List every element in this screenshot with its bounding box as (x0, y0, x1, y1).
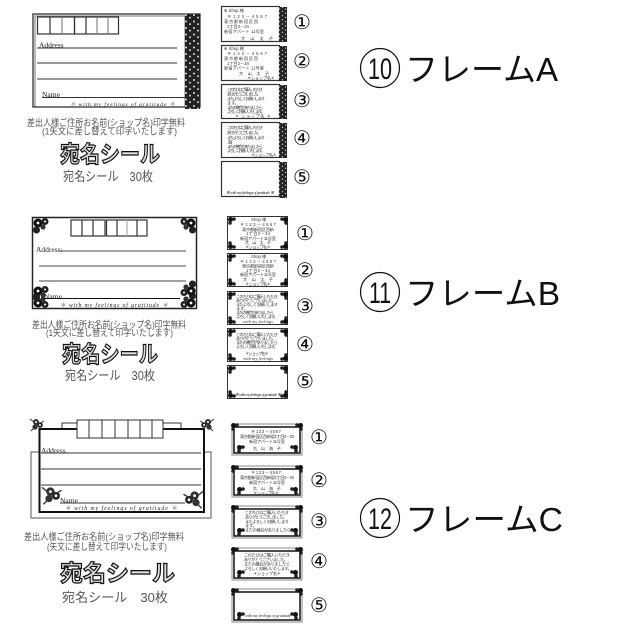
sample B3: よろしくお願いいたします。 (236, 313, 278, 320)
sample C1: 〒123－4567 (251, 429, 282, 434)
frame B sample numbers: ③ (296, 296, 314, 318)
frame A name label: Name (42, 90, 61, 99)
sample C4: よろしくお願いいたします。 (244, 565, 292, 572)
sample C2: 新宿アパート11号室 (249, 479, 285, 486)
sample B2: 新宿アパート11号室 (240, 271, 276, 278)
frame C sample numbers: ① (310, 427, 328, 449)
sample B4: ＊ショップ名＊ (245, 350, 269, 357)
sample B5 (228, 366, 288, 398)
frame A sample numbers (293, 12, 311, 189)
panel: frame B main label (32, 218, 196, 309)
sample C3 (231, 505, 303, 538)
sample B3 (228, 292, 288, 324)
frame C sample numbers: ③ (310, 511, 328, 533)
sample C3: このたびはご購入いただき (245, 509, 289, 516)
sample B2 (228, 253, 288, 288)
frame A sample numbers: ① (293, 12, 311, 34)
sample B3: またよろしくお願いします (236, 301, 278, 308)
frame B caption: 差出人様ご住所お名前(ショップ名)印字無料 (32, 319, 186, 331)
frame C samples (231, 423, 303, 622)
sample A3: またの機会がありましたら (227, 104, 263, 111)
sample B4: ありがとうございました。 (236, 335, 276, 342)
sample A3: ありがとうございました。 (227, 90, 261, 98)
sample C2: 丸 山 海 子 (253, 485, 281, 492)
sample A4: よろしくお願いいたします。 (227, 147, 265, 154)
sample A1: 1丁目2－34 (227, 24, 250, 30)
title: frame A: 10 (368, 53, 392, 86)
sample C1: 新宿アパート11号室 (249, 438, 285, 445)
frame B address label: Address: (36, 245, 63, 254)
frame A sample numbers: ④ (293, 128, 311, 150)
frame B postal code boxes (71, 220, 147, 236)
frame C sample numbers: ⑤ (310, 595, 328, 617)
sample A2: 新宿アパート 11号室 (224, 64, 264, 72)
sample C1: 丸 山 海 子 (253, 445, 281, 452)
sample C2: 東京都新宿区西新宿1丁目2－34 (240, 474, 295, 481)
sample B2: 大 山 太 子 (243, 276, 273, 283)
sample B1: ＊ショップ名＊ (245, 244, 271, 250)
title: frame A: フレームA (405, 51, 558, 88)
frame B sample numbers: ④ (296, 334, 314, 356)
sample B1: 〒123－4567 (240, 222, 277, 227)
frame A product name: 宛名シール (60, 141, 160, 167)
sample A2: 〒123－4567 (227, 51, 268, 56)
frame B caption line 2: (1矢文に差し替えて印字いたします) (46, 327, 173, 339)
frame A sample numbers: ② (293, 51, 311, 73)
sample A2: 東京都新宿区西 (224, 55, 258, 62)
frame A samples (222, 6, 287, 198)
sample B3: このたびはご購入いただき (236, 293, 278, 300)
sample A2 (222, 45, 287, 82)
frame A caption line 2: (1矢文に差し替えて印字いたします) (42, 126, 177, 138)
sample C3: またよろしくお願いします (245, 518, 289, 525)
frame C address label: Address (41, 446, 66, 455)
frame B sample numbers: ⑤ (296, 371, 314, 393)
frame A postal code boxes (38, 17, 118, 34)
frame A sample numbers: ③ (293, 90, 311, 112)
sample B4: with my feelings (243, 356, 273, 361)
sample B4 (228, 328, 288, 362)
sample A1 (222, 6, 287, 42)
sample A1: 〒123－4567 (227, 14, 268, 19)
sample B3: またの機会がありましたら (236, 309, 274, 316)
sample A3 (222, 84, 287, 120)
title: frame B: フレームB (405, 275, 560, 312)
frame C product name: 宛名シール (60, 560, 175, 586)
sample A2: 1丁目2－34 (227, 61, 250, 67)
sample C3: またの機会がありましたら (245, 526, 291, 534)
frame B sample numbers: ② (296, 260, 314, 282)
frame C postal code boxes (77, 420, 163, 438)
sample A1: 新宿アパート 11号室 (224, 28, 264, 35)
sample C2: ＊ショップ名＊ (253, 490, 279, 496)
title: frame C: フレームC (405, 501, 563, 538)
frame C caption: 差出人様ご住所お名前(ショップ名)印字無料 (24, 531, 184, 543)
sample C5 (231, 588, 303, 622)
sample B2: 1丁目2－34 (246, 268, 271, 274)
sample B3: with my feelings (243, 319, 273, 324)
frame C floral ornaments (30, 419, 214, 508)
frame B gratitude line: ＊ with my feelings of gratitude ＊ (60, 302, 168, 309)
frame B sample numbers: ① (296, 223, 314, 245)
sample A3: このたびはご購入いただき (227, 86, 263, 93)
sample C3: ます。 (245, 523, 257, 529)
sample A5: ✻ with my feelings of gratitude ✻ (226, 190, 274, 195)
sample A2: 大 山 太 子 (239, 70, 269, 77)
sample B1: Shop 様 (251, 216, 267, 222)
frame C gratitude line: ＊ with my feelings of gratitude ＊ (65, 505, 177, 512)
frame B address lines (39, 251, 186, 298)
frame A caption: 差出人様ご住所お名前(ショップ名)印字無料 (27, 117, 185, 129)
sample C4: またの機会がありましたら (244, 560, 290, 568)
frame B floral corners (33, 218, 196, 308)
sample C2: 〒123－4567 (251, 470, 282, 475)
sample A4: ありがとうございました。 (227, 129, 261, 136)
frame B name label: Name (44, 292, 63, 301)
sample A3: またよろしくお願いします (227, 95, 265, 102)
frame C address lines (41, 453, 201, 503)
sample A4: このたびはご購入いただき (227, 124, 263, 131)
sample B2: Shop 様 (251, 253, 267, 259)
frame B product name: 宛名シール (62, 341, 158, 367)
sample C5: with my feelings of gratitude (245, 613, 291, 618)
frame A address label: Address (39, 40, 64, 50)
sample A1: ✻ Shop 様 (224, 7, 245, 13)
sample A1: 大 山 太 子 (241, 35, 273, 42)
panel: frame C main label (30, 419, 214, 518)
frame A quantity: 宛名シール 30枚 (63, 169, 153, 184)
sample B5: ✻ with my feelings of gratitude ✻ (235, 392, 281, 397)
sample B1: 東京都新宿区西新 (242, 226, 274, 233)
frame C sample numbers: ② (310, 470, 328, 492)
frame C side tabs (62, 423, 181, 429)
frame B samples (228, 216, 288, 398)
sample B3: ます。 (236, 306, 248, 312)
sample A2: ＊ショップ名＊ (247, 74, 275, 82)
sample B1: 大 山 太 子 (245, 239, 271, 246)
sample C4: ＊ショップ名＊ (253, 570, 281, 577)
frame C sample numbers: ④ (310, 551, 328, 573)
sample B1 (228, 216, 288, 250)
frame A gratitude line: ＊ with my feelings of gratitude ＊ (70, 101, 175, 108)
sample A3: ます。 (227, 100, 239, 106)
sample A4 (222, 122, 287, 158)
sample B4: よろしくお願いいたします。 (236, 343, 278, 350)
sample A4: またよろしくお願いします (227, 134, 265, 141)
sample A4: ます。 (227, 140, 235, 146)
sample C4: ありがとうございました。 (244, 556, 288, 563)
sample A4: ＊ショップ名＊ (251, 152, 277, 158)
sample A1: 東京都新宿区西 (224, 18, 258, 25)
panel: frame A main label (33, 14, 200, 109)
frame B sample numbers (296, 223, 314, 393)
frame A address lines (37, 48, 185, 98)
sample B4: またの機会がありましたら (236, 339, 278, 346)
sample B1: 1丁目2－34 (246, 231, 271, 237)
title: frame C: 12 (368, 503, 392, 536)
sample A4: またの機会がありましたら (227, 143, 263, 150)
sample A3: よろしくお願いいたします。 (227, 108, 265, 115)
sample C4: このたびはご購入いただき (244, 552, 290, 558)
sample C1 (231, 423, 303, 455)
sample B4: このたびはご購入いただき (236, 331, 278, 338)
frame B quantity: 宛名シール 30枚 (65, 368, 155, 383)
frame C sample numbers (310, 427, 328, 617)
sample B3: ありがとうございました。 (236, 297, 276, 304)
sample B2: ＊ショップ名＊ (245, 280, 271, 288)
sample A3: ＊ ショップ名 ＊ (235, 112, 271, 120)
frame C quantity: 宛名シール 30枚 (62, 590, 168, 605)
title: frame B: 11 (369, 277, 391, 310)
sample C4 (231, 547, 303, 580)
frame A floral column (185, 14, 200, 109)
frame C caption line 2: (矢文に差し替えて印字いたします) (47, 541, 167, 553)
sample C2 (231, 465, 303, 497)
sample C1: 東京都新宿区西新宿1丁目2－34 (240, 433, 295, 440)
frame A sample numbers: ⑤ (293, 167, 311, 189)
sample C3: ありがとうございました。 (245, 514, 287, 520)
frame C name label: Name (60, 496, 79, 505)
sample B1: 新宿アパート11号室 (240, 235, 276, 242)
sample B2: 東京都新宿区西新 (242, 262, 274, 270)
sample B2: 〒123－4567 (240, 259, 277, 264)
sample A5 (222, 162, 287, 198)
sample A2: ✻ Shop 様 (224, 45, 245, 51)
